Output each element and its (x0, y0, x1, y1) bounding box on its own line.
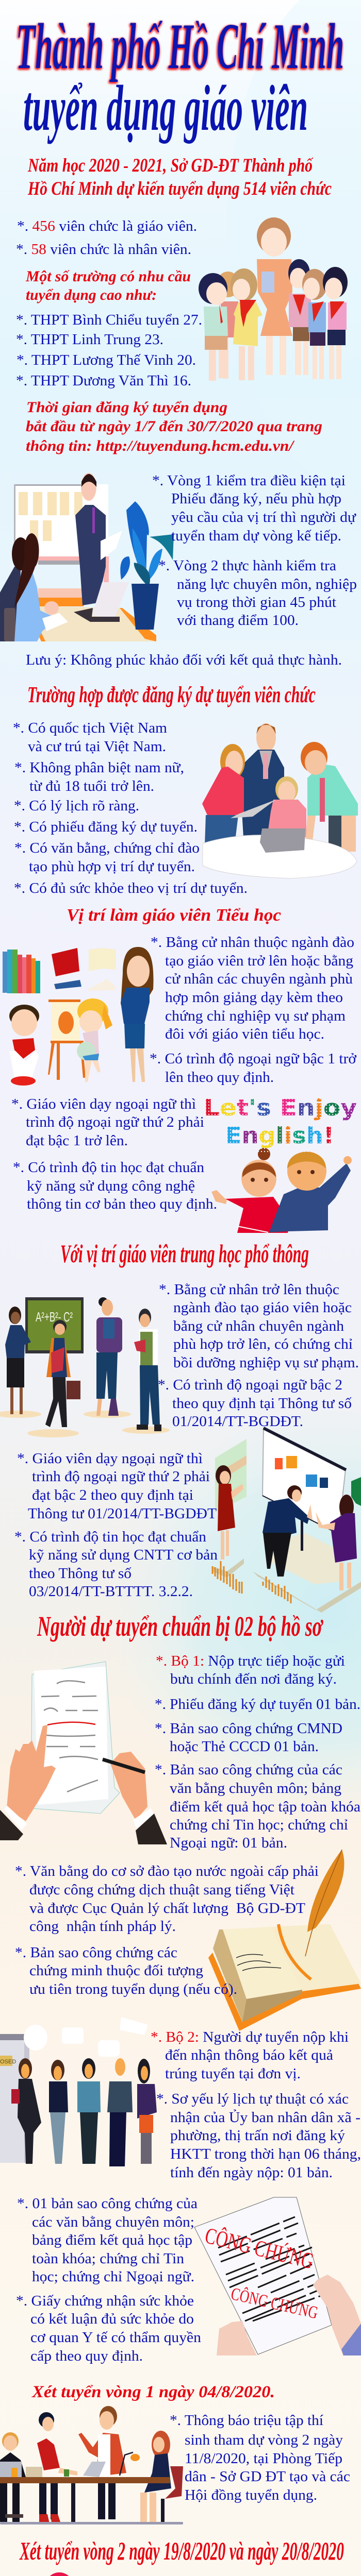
text: application set one: *. Văn bằng do cơ sở đào tạo nước ngoài cấp phải (15, 1863, 319, 1879)
text: application set one (15, 1653, 360, 1997)
text: high school teacher requirements (14, 1281, 359, 1600)
text: application set one: *. Bản sao công chứng của các (155, 1761, 342, 1778)
text: primary teacher requirements: đạt bậc 1 trở lên. (26, 1132, 128, 1149)
text: high school teacher requirements: phù hợp trở lên, có chứng chỉ (173, 1336, 353, 1352)
text: registration period: Thời gian đăng ký tuyển dụng (26, 399, 227, 416)
text: registration period: bắt đầu từ ngày 1/7 đến 30/7/2020 qua trang (26, 418, 322, 435)
text: selection rounds: vụ trong thời gian 45 phút (177, 594, 336, 611)
heading: primary teacher: Vị trí làm giáo viên Tiểu học (67, 906, 281, 925)
text: application set two: *. Sơ yếu lý lịch tự thuật có xác (156, 2091, 349, 2107)
text: school list: *. THPT Dương Văn Thì 16. (16, 372, 191, 389)
title (16, 11, 344, 144)
illustration: notarised document held by hands (194, 2197, 361, 2355)
text: staffing numbers: *. 58 viên chức là nhân viên. (16, 241, 191, 258)
text: selection rounds: yêu cầu của vị trí thì người dự (171, 509, 356, 526)
text: selection rounds (152, 472, 357, 629)
text: application set one: *. Bản sao công chứng các (15, 1944, 177, 1961)
text: school list: *. THPT Linh Trung 23. (16, 331, 163, 348)
illustration: Let's Enjoy English lettering (203, 1095, 358, 1153)
text: primary teacher requirements: lên theo quy định. (165, 1069, 274, 1086)
text: registration period (26, 399, 322, 454)
text: application set one: công nhận tính pháp lý. (29, 1918, 176, 1935)
text: application set two: tính đến ngày nộp: 01 bản. (170, 2164, 333, 2181)
text: application set two: toàn khóa; chứng chỉ Tin (32, 2250, 185, 2267)
illustration: Let's Enjoy English lettering: Let's Enjoy (204, 1095, 357, 1121)
illustration: office recruitment meeting (0, 473, 174, 641)
illustration: notarised document held by hands: CÔNG CHỨNG (203, 2223, 316, 2274)
text: application set two: *. Giấy chứng nhận sức khỏe (16, 2293, 194, 2309)
text: application set one: hoặc Thẻ CCCD 01 bản. (170, 1738, 319, 1755)
text: primary teacher requirements: *. Giáo viên dạy ngoại ngữ thì (11, 1096, 196, 1112)
illustration: teacher with pupils (199, 217, 348, 381)
text: high school teacher requirements: *. Giáo viên dạy ngoại ngữ thì (17, 1450, 203, 1467)
text: selection rounds: Phiếu đăng ký, nếu phù hợp (171, 490, 341, 507)
text: schools with high demand: Một số trường có nhu cầu (25, 268, 191, 285)
text: selection rounds: *. Vòng 1 kiểm tra điều kiện tại (152, 472, 346, 489)
text: high school teacher requirements: bồi dưỡng nghiệp vụ sư phạm. (173, 1354, 359, 1371)
text: round one notice: *. Thông báo triệu tập thí (170, 2412, 323, 2429)
text: high school teacher requirements: kỹ năng sử dụng CNTT cơ bản (29, 1547, 218, 1563)
text: application set two (16, 2029, 361, 2364)
text: eligibility list: *. Có đủ sức khỏe theo vị trí dự tuyển. (14, 880, 248, 896)
text: primary teacher requirements: tạo giáo viên trở lên hoặc bằng (165, 953, 353, 969)
illustration: interview panel at table (0, 2406, 183, 2524)
text: primary teacher requirements (11, 934, 357, 1212)
text: high school teacher requirements: ngành đào tạo giáo viên hoặc (173, 1299, 352, 1316)
text: eligibility list: từ đủ 18 tuổi trở lên. (29, 778, 154, 794)
text: primary teacher requirements: đôi với giáo viên tiểu học. (165, 1026, 324, 1042)
text: eligibility list (13, 720, 248, 896)
text: high school teacher requirements: theo Thông tư số (29, 1565, 132, 1582)
text: primary teacher requirements: *. Bằng cử nhân thuộc ngành đào (151, 934, 354, 951)
illustration: four teachers with chalkboard (0, 1297, 170, 1437)
illustration: hands signing paper (0, 1662, 167, 1844)
text: high school teacher requirements: 01/2014/TT-BGDĐT. (172, 1413, 303, 1430)
subtitle (27, 155, 332, 199)
text: high school teacher requirements: trình độ ngoại ngữ thứ 2 phải (32, 1468, 210, 1485)
text: note on results: Lưu ý: Không phúc khảo đối với kết quả thực hành. (26, 652, 342, 668)
text: high school teacher requirements: bằng cử nhân chuyên ngành (173, 1318, 344, 1334)
text: primary teacher requirements: kỹ năng sử dụng công nghệ (27, 1178, 195, 1194)
text: eligibility list: *. Có văn bằng, chứng chỉ đào (14, 840, 200, 856)
text: eligibility list: và cư trú tại Việt Nam. (28, 738, 166, 755)
illustration: notarised document held by hands: CÔNG CHỨNG (229, 2284, 320, 2323)
text: application set two: trúng tuyển tại đơn vị. (165, 2065, 301, 2082)
text: high school teacher requirements: *. Có trình độ tin học đạt chuẩn (14, 1529, 206, 1545)
text: primary teacher requirements: chứng chỉ nghiệp vụ sư phạm (165, 1008, 346, 1024)
text: selection rounds: năng lực chuyên môn, nghiệp (177, 576, 357, 592)
text: primary teacher requirements: thông tin cơ bản theo quy định. (27, 1196, 217, 1212)
text: schools with high demand: tuyển dụng cao như: (26, 286, 157, 303)
text: application set one: và được Cục Quản lý chất lượng Bộ GD-ĐT (29, 1900, 305, 1917)
text: schools with high demand (25, 268, 191, 303)
text: application set one: văn bằng chuyên môn; bảng (170, 1780, 341, 1797)
text: primary teacher requirements: cử nhân các chuyên ngành phù (165, 971, 353, 987)
text: high school teacher requirements: Thông tư 01/2014/TT-BGDĐT (28, 1505, 217, 1522)
text: application set one: chứng minh thuộc đối tượng (29, 1962, 203, 1979)
illustration: applicants waiting at door (0, 2017, 157, 2166)
text: primary teacher requirements: *. Có trình độ tin học đạt chuẩn (13, 1159, 204, 1176)
text: application set one: điểm kết quả học tập toàn khóa (170, 1799, 360, 1815)
text: high school teacher requirements: đạt bậc 2 theo quy định tại (32, 1487, 193, 1503)
text: selection rounds: tuyển tham dự vòng kế tiếp. (171, 528, 341, 544)
text: high school teacher requirements: *. Có trình độ ngoại ngữ bậc 2 (158, 1377, 342, 1393)
text: application set two: *. 01 bản sao công chứng của (17, 2195, 198, 2212)
illustration: Let's Enjoy English lettering: English! (225, 1123, 334, 1149)
illustration: books, children painting and teacher (3, 947, 154, 1086)
text: application set one: *. Phiếu đăng ký dự tuyển 01 bản. (155, 1696, 360, 1713)
text: primary teacher requirements: *. Có trình độ ngoại ngữ bậc 1 trở (150, 1050, 357, 1067)
text: application set one: được công chứng dịch thuật sang tiếng Việt (29, 1882, 294, 1898)
text: eligibility list: *. Không phân biệt nam nữ, (14, 759, 184, 776)
text: selection rounds: *. Vòng 2 thực hành kiểm tra (158, 557, 336, 574)
text: high school teacher requirements: *. Bằng cử nhân trở lên thuộc (159, 1281, 339, 1298)
text: eligibility list: tạo phù hợp vị trí dự tuyển. (29, 858, 195, 875)
text: registration period: thông tin: http://tuyendung.hcm.edu.vn/ (26, 437, 295, 454)
illustration: quill and open book (208, 1850, 361, 2031)
text: application set two: nhận của Ủy ban nhân dân xã - (170, 2109, 360, 2126)
text: school list: *. THPT Bình Chiểu tuyển 27. (16, 312, 202, 328)
text: round one notice: dân - Sở GD ĐT tạo và các (185, 2468, 350, 2485)
text: application set one: *. Bản sao công chứng CMND (155, 1720, 342, 1737)
text: application set one: ưu tiên trong tuyển dụng (nếu có). (29, 1981, 237, 1997)
text: application set one: *. Bộ 1: Nộp trực tiếp hoặc gửi (156, 1653, 345, 1669)
text: primary teacher requirements: trình độ ngoại ngữ thứ 2 phải (26, 1114, 204, 1130)
text: round one notice: sinh tham dự vòng 2 ngày (185, 2432, 343, 2448)
text: application set two: các văn bằng chuyên môn; (32, 2214, 194, 2230)
text: high school teacher requirements: 03/2014/TT-BTTTT. 3.2.2. (29, 1583, 193, 1600)
text: primary teacher requirements: hợp môn giảng dạy kèm theo (165, 989, 343, 1006)
text: round one notice: 11/8/2020, tại Phòng Tiếp (185, 2450, 342, 2467)
text: selection rounds: với thang điểm 100. (177, 612, 299, 629)
text: application set one: bưu chính đến nơi đăng ký. (170, 1671, 337, 1687)
illustration: presentation board with colleagues (212, 1428, 361, 1613)
text: application set two: phường, thị trấn nơi đăng ký (170, 2127, 345, 2144)
text: application set two: có kết luận đủ sức khỏe do (30, 2311, 194, 2327)
illustration: applicants waiting at door: OSED (0, 2059, 16, 2065)
text: application set two: *. Bộ 2: Người dự tuyển nộp khi (151, 2029, 349, 2045)
illustration: two children waving (211, 1148, 352, 1233)
text: application set two: HKTT trong thời hạn 06 tháng, (170, 2146, 361, 2162)
text: application set two: bảng điểm kết quả học tập (32, 2232, 192, 2248)
illustration: red speaker with megaphone on podium (13, 2572, 147, 2576)
heading: round one: Xét tuyển vòng 1 ngày 04/8/2020. (31, 2383, 275, 2401)
text: eligibility list: *. Có lý lịch rõ ràng. (14, 798, 139, 814)
text: application set one: Ngoại ngữ: 01 bản. (170, 1835, 287, 1851)
text: eligibility list: *. Có quốc tịch Việt Nam (13, 720, 167, 736)
text: application set two: học; chứng chỉ Ngoại ngữ. (32, 2268, 194, 2285)
text: application set two: cơ quan Y tế có thẩm quyền (30, 2329, 202, 2346)
text: round one notice (170, 2412, 350, 2503)
text: school list (16, 312, 202, 389)
text: application set two: cấp theo quy định. (30, 2348, 143, 2364)
text: staffing numbers: *. 456 viên chức là giáo viên. (17, 218, 197, 234)
illustration: four teachers with chalkboard: A²+B²- C² (36, 1309, 73, 1325)
text: round one notice: Hội đồng tuyển dụng. (185, 2487, 317, 2503)
illustration: team around table (202, 723, 358, 878)
text: high school teacher requirements: theo quy định tại Thông tư số (172, 1395, 352, 1412)
text: staffing numbers (16, 218, 197, 258)
text: application set two: đến nhận thông báo kết quả (165, 2047, 333, 2063)
text: school list: *. THPT Lương Thế Vinh 20. (17, 352, 196, 368)
text: application set one: chứng chỉ Tin học; chứng chỉ (170, 1817, 348, 1833)
text: eligibility list: *. Có phiếu đăng ký dự tuyển. (14, 819, 198, 835)
